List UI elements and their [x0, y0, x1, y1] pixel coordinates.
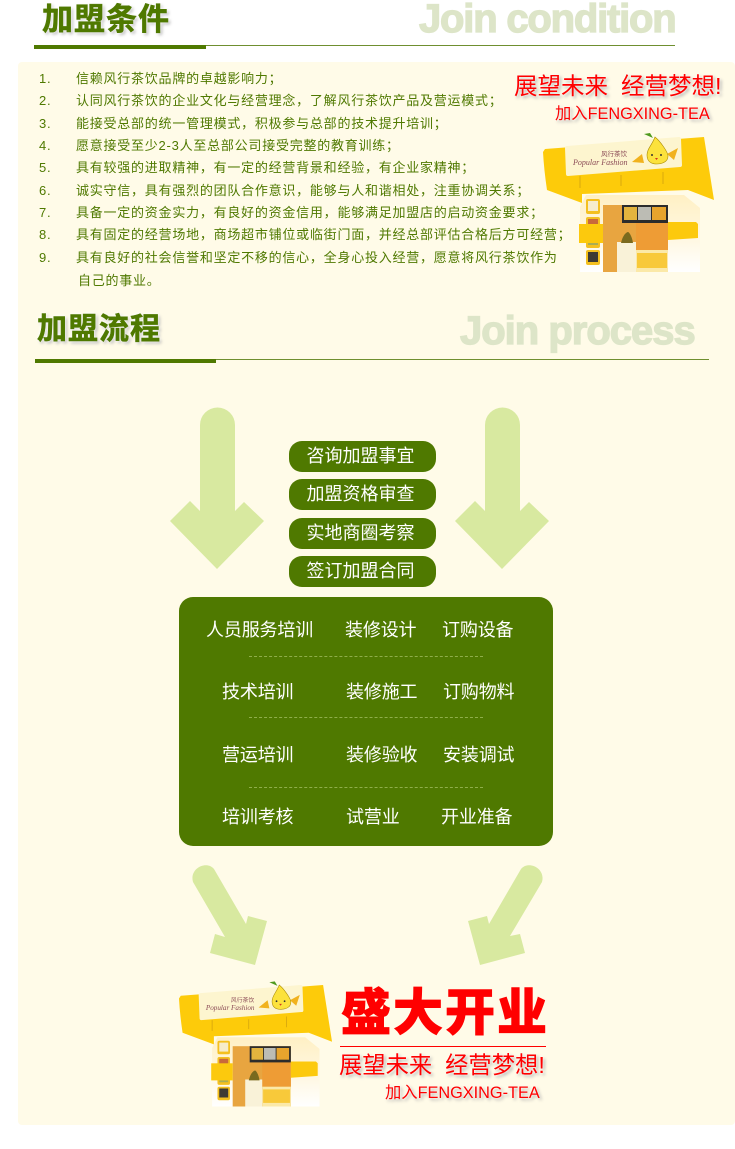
slogan sub: top: 加入FENGXING-TEA [555, 105, 710, 123]
condition 7: 具备一定的资金实力，有良好的资金信用，能够满足加盟店的启动资金要求； [76, 205, 544, 220]
row 1: 人员服务培训: 人员服务培训 [206, 620, 313, 640]
condition 4: 4. [39, 138, 51, 153]
panel: parallel preparation steps [179, 597, 553, 846]
divider: red rule [340, 1046, 546, 1047]
condition 9: 9. [39, 250, 51, 265]
step: 实地商圈考察 [289, 518, 436, 549]
row 4: 试营业: 试营业 [346, 807, 400, 827]
arrow: top left [170, 408, 264, 569]
illustration: kiosk bottom: 风行茶饮 [231, 995, 254, 1004]
row 3: 安装调试: 安装调试 [443, 745, 514, 765]
heading: Join process: Join process [460, 309, 695, 353]
list: join conditions [39, 71, 571, 288]
slogan sub: bottom: 加入FENGXING-TEA [385, 1084, 540, 1102]
condition 5: 具有较强的进取精神，有一定的经营背景和经验，有企业家精神； [76, 160, 475, 175]
row 3: 装修验收: 装修验收 [346, 745, 417, 765]
condition 2: 2. [39, 93, 51, 108]
illustration: kiosk top: Popular Fashion [572, 158, 627, 167]
row 4: 开业准备: 开业准备 [441, 807, 512, 827]
row 3: 营运培训: 营运培训 [222, 745, 293, 765]
condition 6: 6. [39, 183, 51, 198]
step: 咨询加盟事宜 [289, 441, 436, 472]
condition 6: 诚实守信，具有强烈的团队合作意识，能够与人和谐相处，注重协调关系； [76, 183, 530, 198]
step: 加盟资格审查 [289, 479, 436, 510]
heading rule accent: conditions [34, 45, 206, 49]
condition 4: 愿意接受至少2-3人至总部公司接受完整的教育训练； [76, 138, 400, 153]
condition 3: 3. [39, 116, 51, 131]
arrow: top right [455, 408, 549, 569]
slogan: bottom: 展望未来 经营梦想! [339, 1052, 545, 1078]
condition 8: 具有固定的经营场地，商场超市铺位或临街门面，并经总部评估合格后方可经营； [76, 227, 571, 242]
slogan: top: 展望未来 经营梦想! [514, 73, 722, 99]
condition 8: 8. [39, 227, 51, 242]
condition 7: 7. [39, 205, 51, 220]
condition 5: 5. [39, 160, 51, 175]
step: 签订加盟合同 [289, 556, 436, 587]
row 4: 培训考核: 培训考核 [222, 807, 293, 827]
illustration: kiosk bottom: Popular Fashion [205, 1004, 255, 1012]
arrow: bottom right [468, 865, 543, 965]
condition 1: 信赖风行茶饮品牌的卓越影响力； [76, 71, 282, 86]
row 2: 技术培训: 技术培训 [222, 682, 293, 702]
heading: 加盟条件: 加盟条件 [42, 2, 170, 37]
heading: 加盟流程: 加盟流程 [37, 313, 161, 346]
step: 咨询加盟事宜: 咨询加盟事宜 [306, 446, 414, 466]
condition 2: 认同风行茶饮的企业文化与经营理念，了解风行茶饮产品及营运模式； [76, 93, 503, 108]
condition 3: 能接受总部的统一管理模式，积极参与总部的技术提升培训； [76, 116, 448, 131]
heading rule: process [35, 359, 709, 363]
heading rule: conditions [34, 45, 675, 49]
row 2: 订购物料: 订购物料 [443, 682, 514, 702]
condition 9: 具有良好的社会信誉和坚定不移的信心，全身心投入经营，愿意将风行茶饮作为 [76, 250, 558, 265]
row 1: 订购设备: 订购设备 [442, 620, 513, 640]
step: 实地商圈考察: 实地商圈考察 [306, 523, 414, 543]
heading rule accent: process [35, 359, 216, 363]
row 2: 装修施工: 装修施工 [346, 682, 417, 702]
arrow: bottom left [192, 865, 267, 965]
illustration: kiosk top: 风行茶饮 [601, 148, 628, 158]
row 1: 装修设计: 装修设计 [345, 620, 416, 640]
headline: 盛大开业: 盛大开业 [341, 985, 549, 1041]
condition 1: 1. [39, 71, 51, 86]
step: 签订加盟合同: 签订加盟合同 [306, 561, 414, 581]
step: 加盟资格审查: 加盟资格审查 [306, 484, 414, 504]
preparation grid [206, 620, 514, 827]
condition 9 continued: 自己的事业。 [78, 273, 161, 288]
